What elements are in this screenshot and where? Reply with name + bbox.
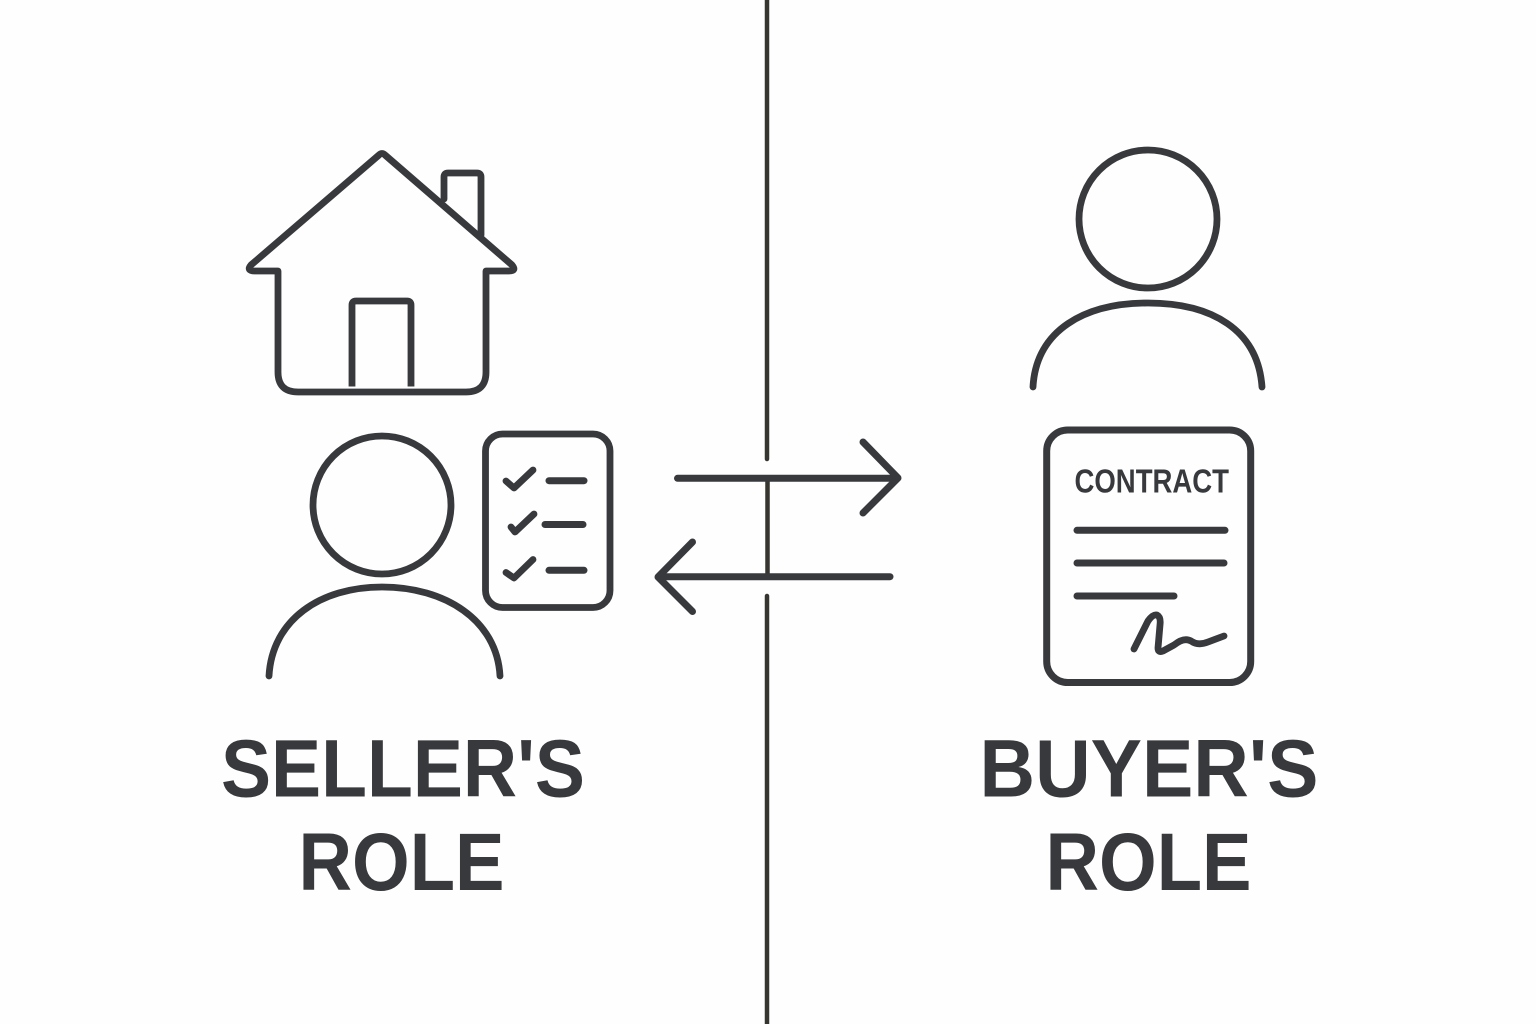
- heading: buyer's role: ROLE: [1046, 817, 1252, 908]
- contract heading: CONTRACT: [1074, 462, 1229, 500]
- icon: seller checklist: [486, 434, 610, 608]
- arrow: buyer to seller: [658, 542, 890, 612]
- heading: buyer's role: [980, 724, 1318, 908]
- heading: seller's role: ROLE: [298, 817, 504, 908]
- icon: seller person: [269, 436, 500, 676]
- heading: seller's role: SELLER'S: [221, 724, 585, 814]
- icon: house: [249, 154, 514, 392]
- heading: seller's role: [221, 724, 585, 908]
- center divider: [765, 0, 770, 1024]
- heading: buyer's role: BUYER'S: [980, 724, 1318, 814]
- icon: contract document: [1047, 430, 1251, 682]
- arrow: seller to buyer: [678, 442, 898, 513]
- icon: buyer person: [1033, 150, 1262, 387]
